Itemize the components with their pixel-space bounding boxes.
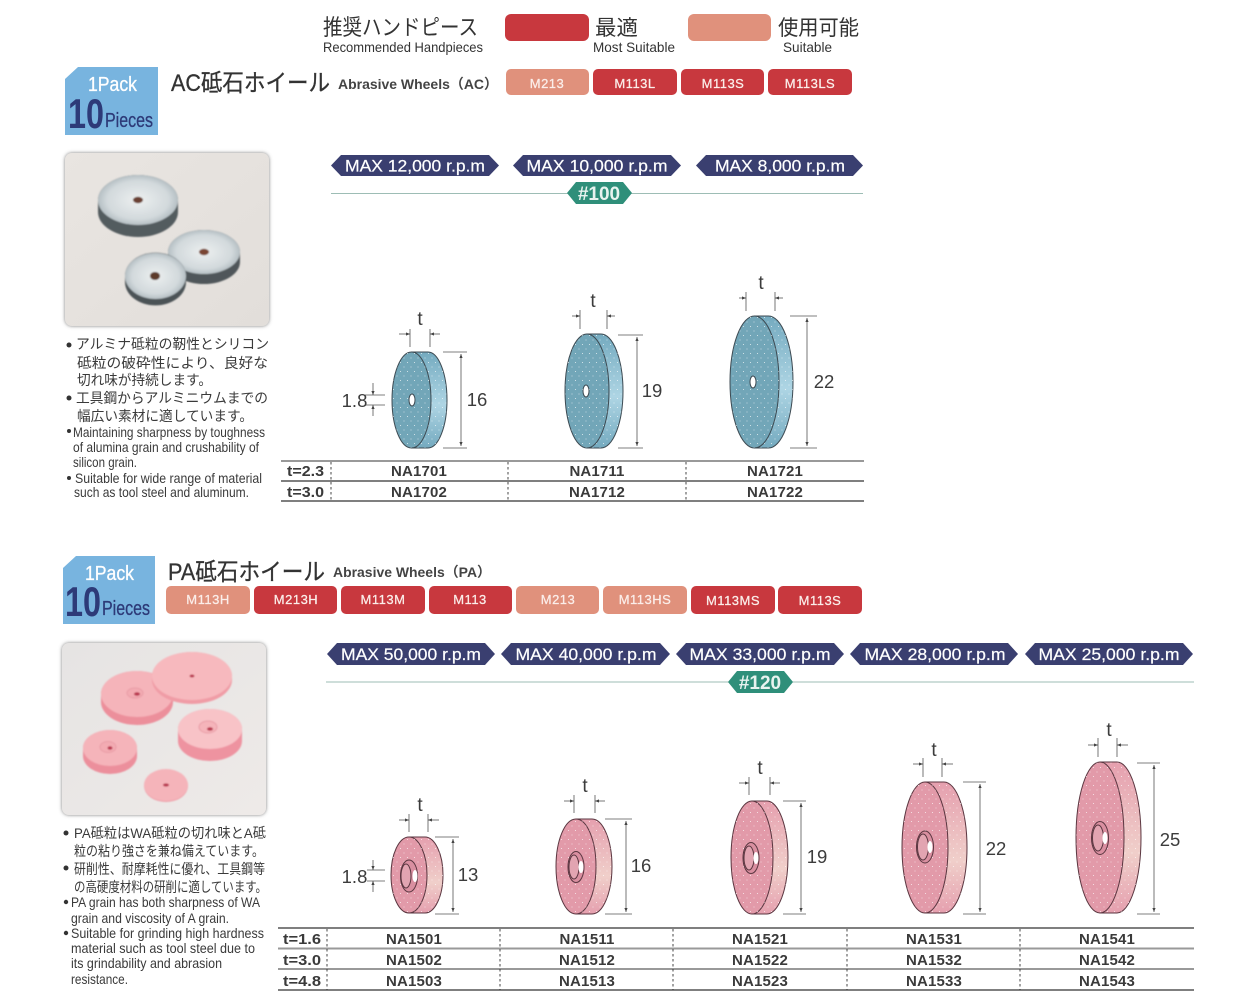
handpiece chips [166,586,862,614]
description text: Maintaining sharpness by toughness [73,424,265,440]
description text: 砥粒の破砕性により、良好な [77,355,268,371]
wheel diagram: 19 mm: 19 [807,846,827,867]
product code table [281,461,864,501]
description text: its grindability and abrasion [71,955,222,971]
product code table: NA1533 [906,973,962,990]
pack badge: 1 pack 10 pieces: 1Pack [88,74,138,96]
heading: AC wheels: Abrasive Wheels（AC） [338,76,498,92]
product code table: NA1532 [906,952,962,969]
wheel diagram: 25 mm: t [1106,720,1112,741]
handpiece chips: M213 [541,592,575,607]
product code table: NA1721 [747,463,803,480]
wheel diagram: 13 mm: 1.8 [342,866,367,887]
description text: 粒の粘り強さを兼ね備えています。 [74,843,264,859]
wheel diagram: 25 mm [1076,720,1180,914]
description text: の高硬度材料の研削に適しています。 [74,879,267,895]
wheel diagram: 22 mm: t [758,273,764,294]
description text: アルミナ砥粒の靭性とシリコン [76,336,269,352]
handpiece chips: M113MS [706,593,760,608]
product code table: NA1513 [559,973,615,990]
wheel diagram: 13 mm: 13 [458,864,478,885]
product code table: NA1712 [569,484,625,501]
product code table: NA1522 [732,952,788,969]
handpiece chips: M113L [614,76,656,91]
wheel diagram: 16 mm: t [582,776,588,797]
wheel diagram: 16 mm [342,309,487,448]
product code table: t=2.3 [287,463,324,480]
wheel diagram: 16 mm: 16 [631,855,651,876]
grit tag #100 [331,182,863,205]
wheel diagram: 19 mm [731,758,827,914]
legend swatch: most suitable: 最適 [595,17,638,40]
speed banners: MAX 10,000 r.p.m [526,156,668,176]
pack badge: 1 pack 10 pieces: Pieces [105,110,153,132]
speed banners: MAX 25,000 r.p.m [1038,645,1180,664]
description text: of alumina grain and crushability of [73,439,259,455]
product code table: t=4.8 [283,973,321,990]
speed banners: MAX 40,000 r.p.m [516,645,656,664]
product code table: t=3.0 [287,484,324,501]
product code table: NA1512 [559,952,615,969]
speed banners [331,155,863,176]
description text: 切れ味が持続します。 [77,372,212,388]
wheel diagram: 19 mm: 19 [642,380,662,401]
handpiece chips: M113H [186,592,230,607]
description text: 研削性、耐摩耗性に優れ、工具鋼等 [74,861,265,877]
product code table: NA1711 [569,463,625,480]
heading: AC wheels: AC砥石ホイール [171,70,330,97]
description text: material such as tool steel due to [71,940,255,956]
description text: 幅広い素材に適しています。 [77,408,253,424]
pack badge: 1 pack 10 pieces: 10 [65,578,101,625]
wheel diagram: 25 mm: 25 [1160,829,1180,850]
wheel diagram: 16 mm: t [417,309,423,330]
description text: PA grain has both sharpness of WA [71,894,261,910]
grit tag #100: #100 [578,184,620,205]
legend swatch: suitable: 使用可能 [778,17,859,40]
wheel diagram: 22 mm: 22 [986,838,1006,859]
heading: PA wheels: Abrasive Wheels（PA） [333,564,491,580]
description text: Suitable for grinding high hardness [71,925,264,941]
handpiece chips: M113S [702,76,744,91]
product code table: t=3.0 [283,952,321,969]
product code table: NA1542 [1079,952,1135,969]
speed banners: MAX 50,000 r.p.m [341,645,481,664]
handpiece chips: M113HS [619,592,671,607]
handpiece chips [506,69,852,95]
pack badge: 1 pack 10 pieces [65,67,158,137]
grit tag #120 [326,671,1194,694]
grit tag #120: #120 [739,673,781,694]
legend heading: Recommended Handpieces [323,39,483,55]
description text: silicon grain. [73,454,137,470]
product code table: NA1701 [391,463,447,480]
legend swatch: most suitable: Most Suitable [593,39,675,55]
product code table: NA1531 [906,931,962,948]
legend swatch: suitable: Suitable [783,39,832,55]
legend heading: 推奨ハンドピース [323,15,478,40]
wheel diagram: 19 mm [565,291,662,448]
description text [64,825,267,987]
pack badge: 1 pack 10 pieces: Pieces [102,598,150,620]
legend: recommended handpieces [323,14,859,55]
wheel diagram: 22 mm: 22 [814,371,834,392]
description text: such as tool steel and aluminum. [74,484,249,500]
wheel diagram: 13 mm [342,795,478,914]
photo: pink wheels [62,643,266,815]
product code table: NA1702 [391,484,447,501]
product code table: t=1.6 [283,931,321,948]
description text: PA砥粒はWA砥粒の切れ味とA砥 [74,825,266,841]
wheel diagram: 16 mm [556,776,651,914]
legend heading [323,15,483,55]
product code table: NA1503 [386,973,442,990]
description text: resistance. [71,971,128,987]
legend swatch: most suitable [505,14,675,55]
speed banners: MAX 28,000 r.p.m [864,645,1006,664]
wheel diagram: 16 mm: 16 [467,389,487,410]
heading: AC wheels [171,70,498,97]
product code table: NA1511 [559,931,615,948]
description text: 工具鋼からアルミニウムまでの [76,390,268,406]
speed banners: MAX 33,000 r.p.m [690,645,830,664]
pack badge: 1 pack 10 pieces: 1Pack [85,563,135,585]
product code table: NA1502 [386,952,442,969]
pack badge: 1 pack 10 pieces [63,556,155,625]
wheel diagram: 13 mm: t [417,795,423,816]
wheel diagram: 22 mm [902,740,1006,914]
panel: PA abrasive wheels [62,556,1194,990]
wheel diagram: 22 mm [730,273,834,448]
wheel diagram: 19 mm: t [590,291,596,312]
handpiece chips: M113LS [785,76,835,91]
product code table: NA1541 [1079,931,1135,948]
description text [66,336,269,500]
wheel diagram: 19 mm: t [757,758,763,779]
handpiece chips: M113M [361,592,405,607]
speed banners: MAX 8,000 r.p.m [715,156,845,176]
speed banners [327,643,1193,665]
description text: grain and viscosity of A grain. [71,910,229,926]
wheel diagram: 16 mm: 1.8 [342,390,367,411]
legend swatch: suitable [688,14,859,55]
product code table: NA1722 [747,484,803,501]
heading: PA wheels [168,559,491,586]
product code table: NA1501 [386,931,442,948]
product code table [278,928,1194,990]
product code table: NA1521 [732,931,788,948]
wheel diagram: 22 mm: t [931,740,937,761]
product code table: NA1523 [732,973,788,990]
handpiece chips: M213 [530,76,564,91]
pack badge: 1 pack 10 pieces: 10 [68,90,104,137]
handpiece chips: M113S [799,593,841,608]
panel: AC abrasive wheels [65,67,864,501]
product code table: NA1543 [1079,973,1135,990]
heading: PA wheels: PA砥石ホイール [168,559,325,586]
handpiece chips: M113 [453,592,487,607]
handpiece chips: M213H [274,592,318,607]
description text: Suitable for wide range of material [75,470,262,486]
speed banners: MAX 12,000 r.p.m [345,156,485,176]
photo: grey wheels [65,153,269,326]
